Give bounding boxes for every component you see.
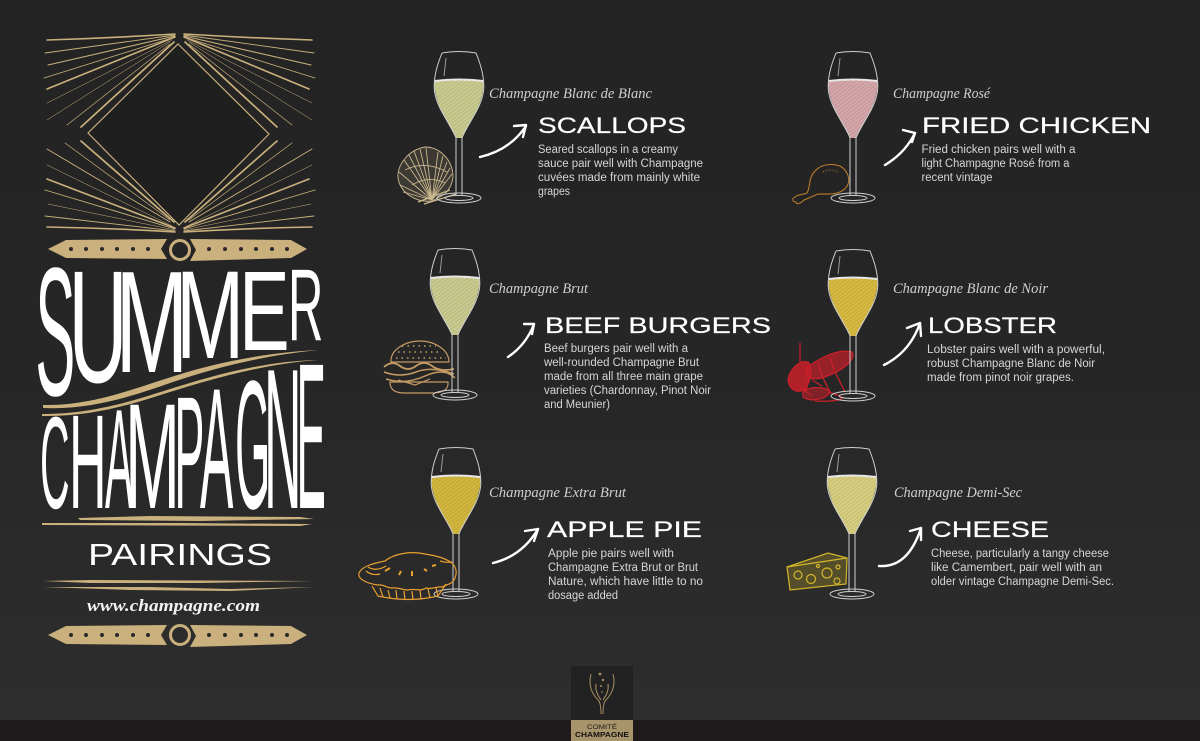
- heading: SCALLOPS: [538, 113, 686, 138]
- label: Champagne Brut: [489, 281, 589, 297]
- glass: rose: [828, 52, 878, 203]
- icon: lobster: [788, 343, 853, 401]
- description: light Champagne Rosé from a: [922, 158, 1070, 170]
- description: Nature, which have little to no: [548, 576, 703, 588]
- description: Seared scallops in a creamy: [538, 144, 678, 156]
- arrow: [884, 323, 921, 365]
- ornament: bottom band: [48, 625, 307, 647]
- arrow: [508, 324, 534, 357]
- description: [548, 548, 703, 602]
- title: champagne: P: [174, 364, 204, 542]
- logo: comite champagne: CHAMPAGNE: [575, 730, 629, 739]
- title: summer: R: [288, 248, 323, 362]
- glass: demi-sec: [827, 448, 877, 599]
- heading: FRIED CHICKEN: [922, 113, 1151, 138]
- description: like Camembert, pair well with an: [931, 562, 1102, 574]
- panel: lobster: [788, 250, 1105, 401]
- arrow: [885, 130, 915, 165]
- title: summer: U: [68, 237, 128, 416]
- glass: blanc de blanc: [434, 52, 484, 203]
- panel: fried chicken: [793, 52, 1151, 204]
- title: summer: E: [239, 249, 290, 375]
- divider: wave: [42, 350, 318, 416]
- title: summer: S: [35, 230, 75, 434]
- arrow: [493, 529, 538, 563]
- label: Champagne Blanc de Noir: [893, 281, 1048, 297]
- icon: burger: [384, 341, 455, 393]
- description: robust Champagne Blanc de Noir: [927, 358, 1095, 370]
- divider: double rule lower: [43, 580, 315, 591]
- icon: apple pie: [359, 553, 456, 600]
- glass: blanc de noir: [828, 250, 878, 401]
- title: champagne: E: [296, 320, 326, 552]
- description: Cheese, particularly a tangy cheese: [931, 548, 1109, 560]
- title: champagne: [40, 320, 326, 552]
- icon: chicken drumstick: [793, 164, 849, 204]
- divider: double rule: [42, 516, 314, 526]
- title: champagne: C: [40, 389, 70, 536]
- description: made from all three main grape: [544, 371, 703, 383]
- description: [922, 144, 1076, 184]
- description: Champagne Extra Brut or Brut: [548, 562, 699, 574]
- glass: extra brut: [431, 448, 481, 599]
- panel: apple pie: [359, 448, 703, 602]
- panel: scallops: [398, 52, 703, 204]
- glass: brut: [430, 248, 480, 400]
- title: champagne: A: [200, 352, 234, 545]
- icon: scallop shell: [398, 147, 456, 204]
- description: and Meunier): [544, 399, 610, 411]
- logo: comite champagne: [571, 666, 633, 741]
- description: Fried chicken pairs well with a: [922, 144, 1076, 156]
- website: www.champagne.com: [87, 596, 260, 615]
- subtitle: pairings: PAIRINGS: [88, 537, 272, 572]
- title: champagne: M: [125, 372, 180, 540]
- title: champagne: A: [105, 381, 133, 539]
- heading: CHEESE: [931, 517, 1049, 542]
- description: Apple pie pairs well with: [548, 548, 674, 560]
- description: [543, 343, 711, 411]
- description: Beef burgers pair well with a: [544, 343, 689, 355]
- title: summer: M: [115, 242, 188, 403]
- description: [927, 344, 1105, 384]
- description: cuvées made from mainly white: [538, 172, 700, 184]
- logo: comite champagne: COMITÉ: [587, 722, 618, 731]
- label: Champagne Demi-Sec: [894, 485, 1023, 501]
- arrow: [480, 125, 526, 157]
- title: champagne: N: [264, 327, 302, 550]
- arrow: [879, 528, 921, 566]
- label: Champagne Blanc de Blanc: [489, 86, 653, 102]
- description: [538, 144, 703, 198]
- icon: cheese wedge: [787, 553, 847, 590]
- description: Lobster pairs well with a powerful,: [927, 344, 1105, 356]
- description: varieties (Chardonnay, Pinot Noir: [544, 385, 711, 397]
- panel: cheese: [787, 448, 1114, 599]
- description: recent vintage: [922, 172, 992, 184]
- description: grapes: [538, 186, 570, 198]
- heading: LOBSTER: [928, 313, 1057, 338]
- description: well-rounded Champagne Brut: [543, 357, 700, 369]
- description: sauce pair well with Champagne: [538, 158, 703, 170]
- bottom bar: [0, 720, 1200, 741]
- panel: beef burgers: [384, 248, 771, 411]
- description: made from pinot noir grapes.: [927, 372, 1074, 384]
- ornament: top band: [48, 239, 307, 261]
- heading: BEEF BURGERS: [545, 313, 771, 338]
- label: Champagne Rosé: [893, 86, 991, 102]
- description: dosage added: [548, 590, 618, 602]
- description: older vintage Champagne Demi-Sec.: [931, 576, 1114, 588]
- description: [931, 548, 1114, 588]
- ornament: sunburst diamond: [44, 34, 315, 232]
- heading: APPLE PIE: [547, 517, 702, 542]
- label: Champagne Extra Brut: [489, 485, 627, 501]
- title: summer: [35, 230, 323, 434]
- title: champagne: G: [235, 343, 270, 548]
- title: champagne: H: [69, 387, 107, 537]
- title: summer: M: [176, 246, 244, 385]
